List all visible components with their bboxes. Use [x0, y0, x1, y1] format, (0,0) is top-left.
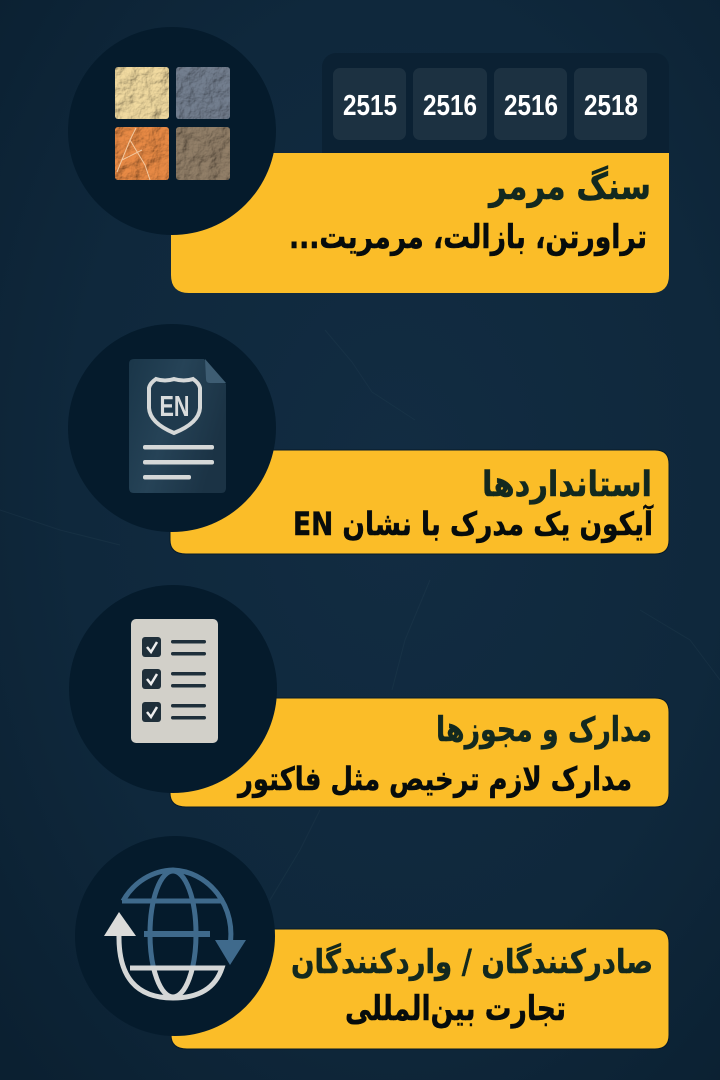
yellow card — [170, 450, 669, 554]
heading: مدارک و مجوزها — [436, 710, 652, 750]
code chips: 2516 — [504, 90, 558, 122]
icon circle — [68, 324, 276, 532]
icon circle — [69, 585, 277, 793]
subheading: مدارک لازم ترخیص مثل فاکتور — [236, 760, 632, 798]
icon: EN document: EN — [160, 391, 190, 423]
heading: صادرکنندگان / واردکنندگان — [291, 942, 653, 982]
icon circle — [75, 836, 275, 1036]
yellow card — [170, 698, 669, 807]
panel: exporters and importers — [75, 836, 669, 1049]
icon: globe with arrows — [104, 870, 246, 998]
yellow card — [171, 929, 669, 1049]
heading: استانداردها — [482, 465, 652, 505]
icon: stone swatches — [115, 67, 230, 180]
subheading: آیکون یک مدرک با نشان EN — [293, 504, 654, 543]
panel: documents and permits — [69, 585, 669, 807]
panel: marble stone — [68, 27, 669, 293]
code tray — [322, 53, 669, 173]
code chips — [333, 68, 647, 140]
heading: سنگ مرمر — [487, 165, 651, 208]
code chips: 2515 — [343, 90, 397, 122]
icon: checklist — [131, 619, 218, 743]
background cracks — [0, 330, 720, 900]
subheading: تراورتن، بازالت، مرمریت... — [289, 217, 647, 257]
code chips: 2516 — [423, 90, 477, 122]
yellow card — [171, 153, 669, 293]
icon: EN document — [129, 359, 226, 493]
icon circle — [68, 27, 276, 235]
panel: standards — [68, 324, 669, 554]
code chips: 2518 — [584, 90, 638, 122]
subheading: تجارت بین‌المللی — [345, 989, 566, 1029]
